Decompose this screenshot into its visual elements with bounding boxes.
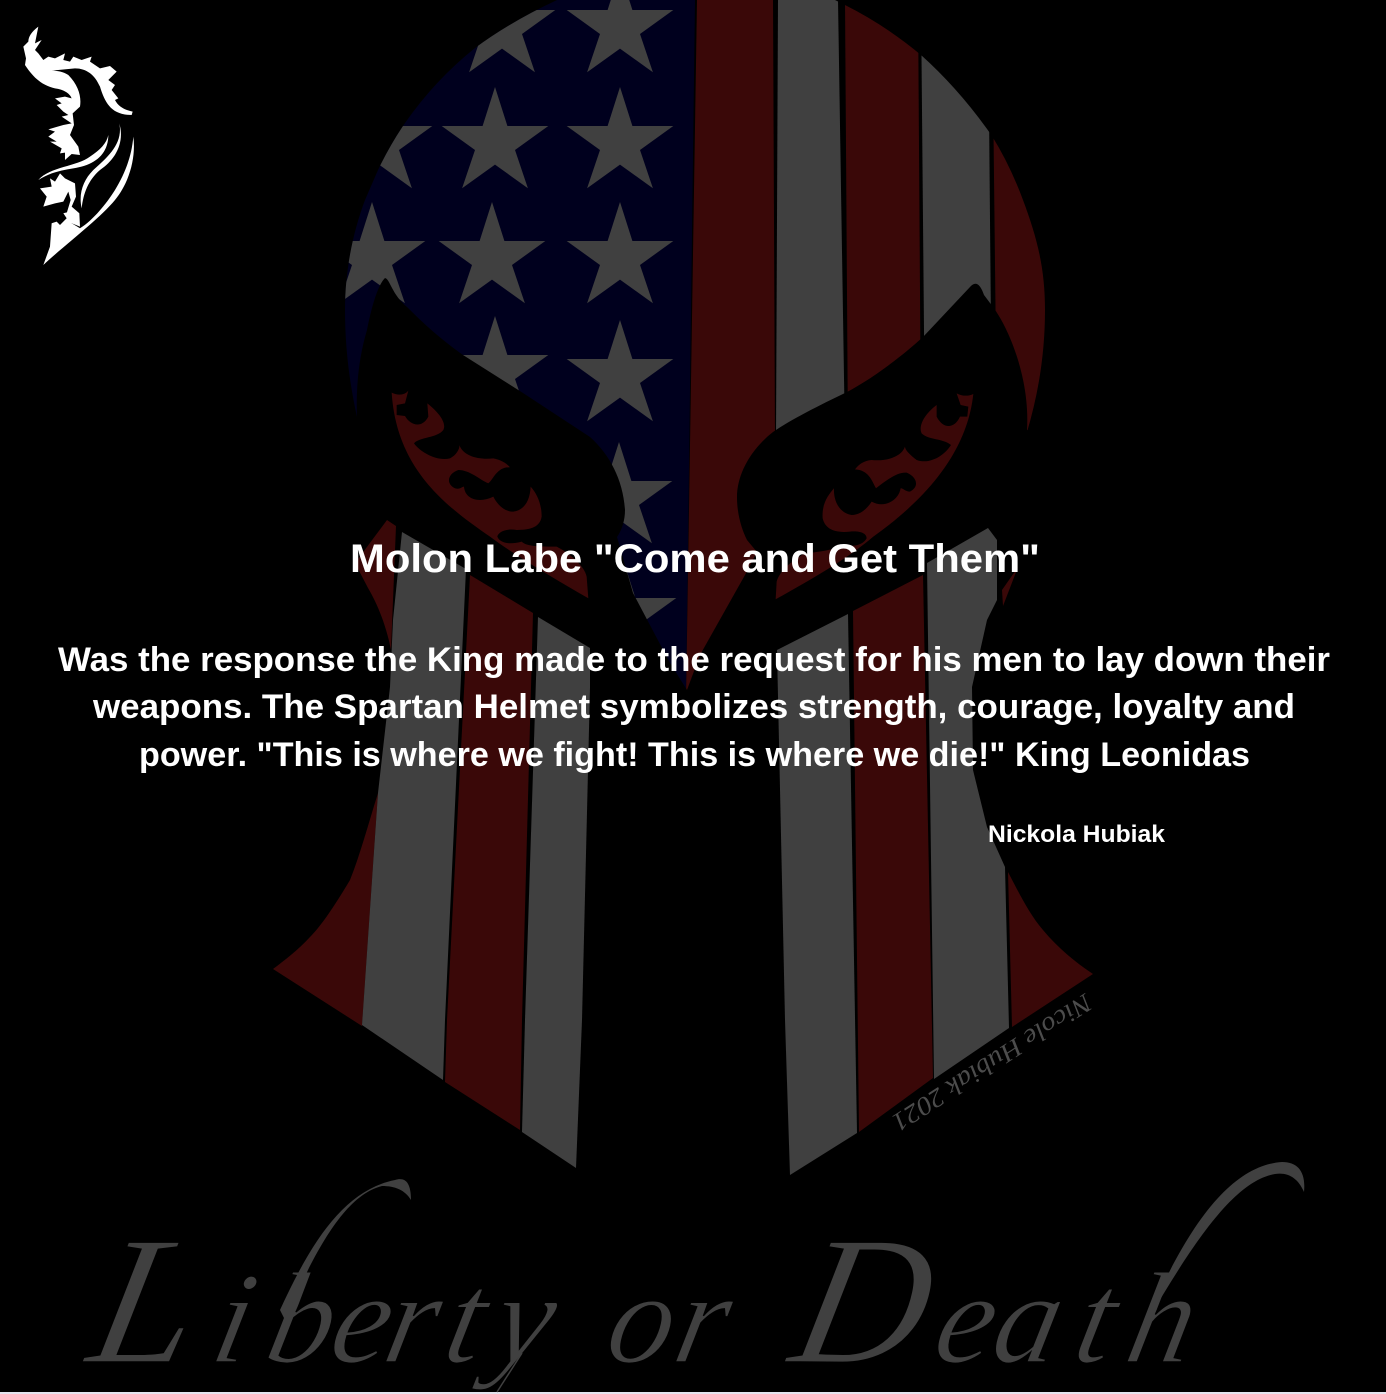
liberty or death slogan: i	[202, 1247, 269, 1391]
right eye flame detail	[776, 393, 973, 599]
helmet dome with flag	[319, 0, 1050, 700]
liberty or death slogan: o	[596, 1247, 691, 1391]
liberty or death slogan: t	[434, 1247, 504, 1391]
left cheek guard	[273, 520, 590, 1168]
liberty or death slogan: r	[374, 1247, 456, 1391]
artist signature: Nicole Hubiak 2021	[886, 987, 1098, 1137]
body text: Was the response the King made to the request for his men to lay down their	[58, 641, 1330, 679]
title: Molon Labe "Come and Get Them"	[350, 537, 1040, 581]
white stars	[345, 0, 676, 619]
body text: weapons. The Spartan Helmet symbolizes strength, courage, loyalty and	[92, 688, 1295, 726]
liberty or death slogan: e	[924, 1247, 1012, 1391]
liberty or death slogan: a	[982, 1247, 1077, 1391]
b ascender swash	[280, 1179, 411, 1320]
liberty or death slogan: e	[320, 1247, 408, 1391]
left eye flame detail	[392, 391, 588, 598]
y descender stroke	[497, 1353, 522, 1392]
liberty or death slogan: r	[664, 1247, 746, 1391]
body text: power. "This is where we fight! This is where we die!" King Leonidas	[139, 736, 1250, 774]
liberty or death slogan: b	[256, 1247, 351, 1391]
body text	[58, 641, 1330, 774]
logo: white tribal emblem	[23, 27, 134, 265]
flag stripes	[686, 0, 1050, 700]
liberty or death slogan: h	[1116, 1247, 1211, 1391]
right cheek guard	[777, 528, 1093, 1175]
liberty or death slogan	[72, 1162, 1304, 1394]
h ascender swash	[1158, 1162, 1304, 1298]
left eye socket	[340, 278, 687, 710]
liberty or death slogan: y	[471, 1247, 571, 1391]
right eye socket	[687, 284, 1050, 710]
liberty or death slogan: t	[1064, 1247, 1134, 1391]
author credit: Nickola Hubiak	[988, 821, 1165, 848]
spartan helmet with american flag pattern	[273, 0, 1098, 1175]
navy star field	[340, 0, 695, 700]
